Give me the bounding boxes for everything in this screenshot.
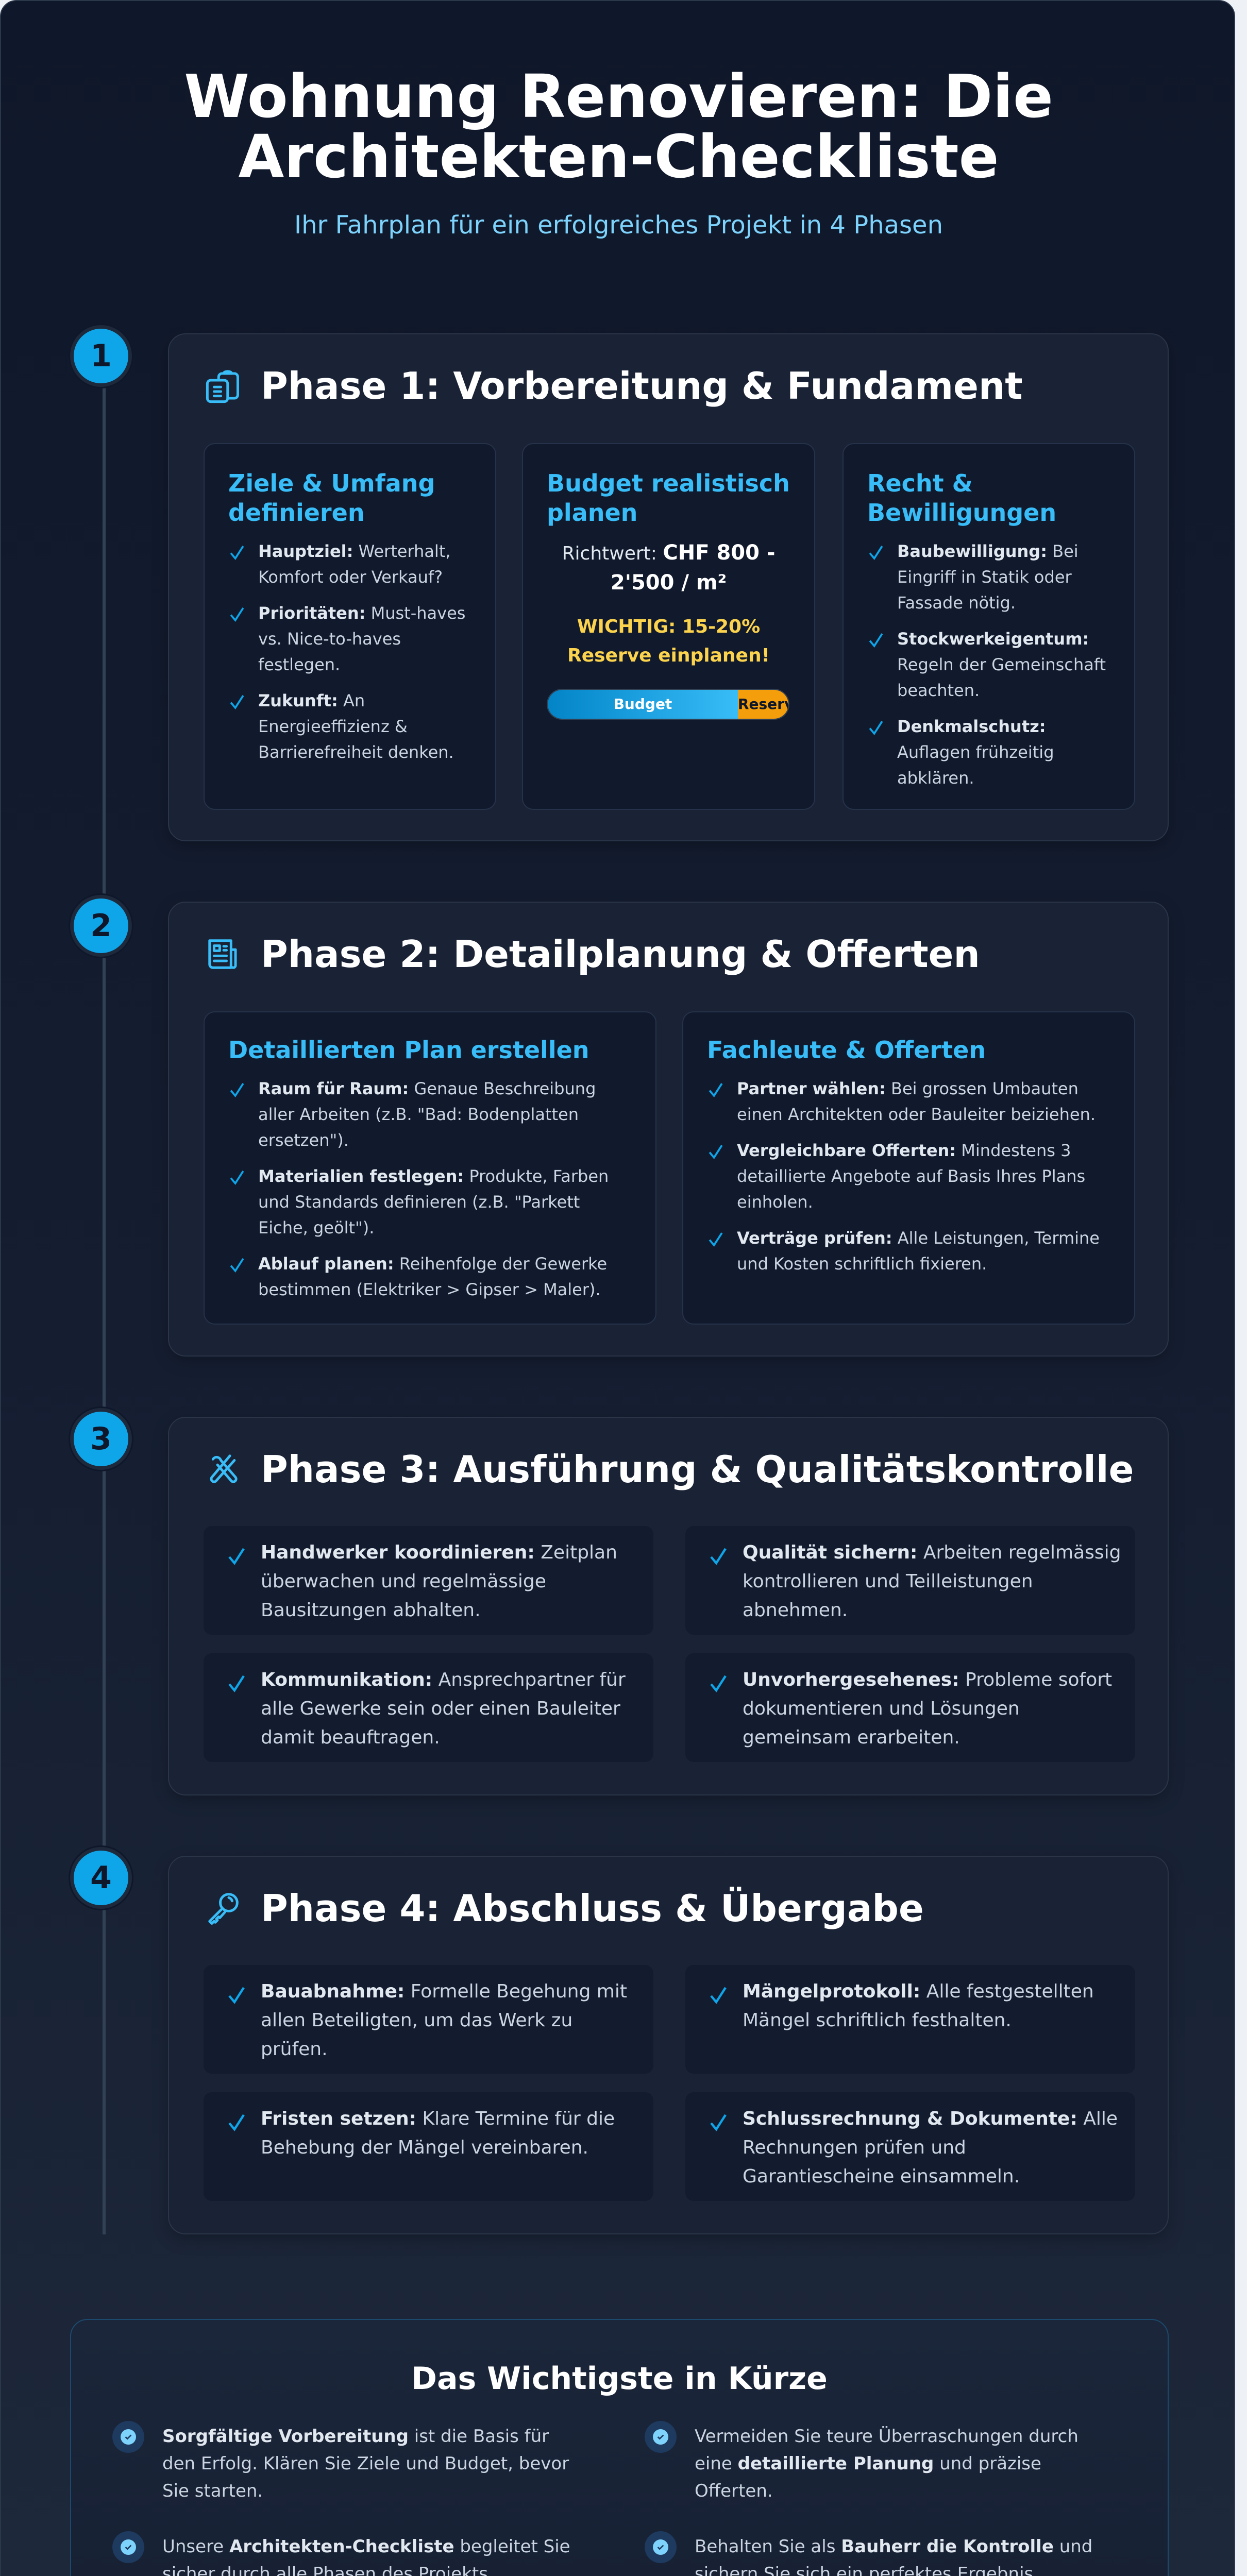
subcard: plan: Raum für Raum: Genaue Beschreibung aller Arbeiten (z.B. "Bad: Bodenplatten ersetzen"). — [258, 1079, 596, 1150]
title: Architekten-Checkliste — [238, 123, 999, 192]
icon: tools — [210, 1454, 238, 1483]
reserve note: WICHTIG: 15-20% Reserve einplanen! — [567, 616, 770, 666]
budget bar: Budget — [614, 696, 672, 713]
step marker 1: 1 — [90, 338, 112, 374]
summary item 4: Behalten Sie als Bauherr die Kontrolle und — [695, 2536, 1092, 2557]
subcard: offerten: Vergleichbare Offerten: Mindestens 3 detaillierte Angebote auf Basis Ihres Plans einholen. — [737, 1141, 1085, 1212]
item: unvorhergesehenes — [685, 1653, 1135, 1762]
icon: key — [208, 1893, 239, 1925]
item: maengelprotokoll: Mängelprotokoll: Alle festgestellten — [743, 1981, 1094, 2002]
subcard: plan — [204, 1011, 656, 1325]
item: fristen: Fristen setzen: Klare Termine für die — [261, 2108, 615, 2129]
step marker 4 — [70, 1847, 132, 1909]
subcard: recht: Recht & Bewilligungen — [867, 469, 1056, 527]
summary item 3 — [112, 2531, 570, 2576]
item: maengelprotokoll — [685, 1965, 1135, 2074]
item: bauabnahme: Bauabnahme: Formelle Begehung mit — [261, 1981, 627, 2002]
subcard: recht: Stockwerkeigentum: Regeln der Gemeinschaft beachten. — [897, 629, 1106, 700]
summary item 3: Unsere Architekten-Checkliste begleitet Sie — [162, 2536, 570, 2557]
heading: phase 2: Phase 2: Detailplanung & Offerten — [261, 933, 980, 976]
subcard: budget — [522, 443, 815, 810]
step marker 4: 4 — [90, 1860, 112, 1896]
subcard: plan: Materialien festlegen: Produkte, Farben und Standards definieren (z.B. "Parkett Eiche, geölt"). — [258, 1166, 609, 1238]
heading: phase 1: Phase 1: Vorbereitung & Fundament — [261, 364, 1023, 408]
budget value: Richtwert: CHF 800 - 2'500 / m² — [562, 541, 775, 595]
icon: clipboard — [206, 370, 239, 403]
subtitle: Ihr Fahrplan für ein erfolgreiches Projekt in 4 Phasen — [294, 211, 943, 240]
item: schlussrechnung — [685, 2092, 1135, 2201]
subcard: ziele: Prioritäten: Must-haves vs. Nice-to-haves festlegen. — [258, 603, 465, 674]
subcard: offerten: Partner wählen: Bei grossen Umbauten einen Architekten oder Bauleiter beiziehen. — [737, 1079, 1096, 1124]
subcard: plan: Ablauf planen: Reihenfolge der Gewerke bestimmen (Elektriker > Gipser > Maler). — [258, 1254, 607, 1299]
item: unvorhergesehenes: Unvorhergesehenes: Probleme sofort — [743, 1669, 1112, 1690]
item: schlussrechnung: Schlussrechnung & Dokumente: Alle — [743, 2108, 1118, 2129]
summary item 1: den Erfolg. Klären Sie Ziele und Budget, bevor — [162, 2453, 569, 2474]
subcard: offerten: Verträge prüfen: Alle Leistungen, Termine und Kosten schriftlich fixieren. — [737, 1228, 1100, 1274]
item: unvorhergesehenes: gemeinsam erarbeiten. — [743, 1727, 960, 1748]
item: qualitaet — [685, 1526, 1135, 1635]
subcard: recht: Baubewilligung: Bei Eingriff in Statik oder Fassade nötig. — [897, 541, 1079, 613]
item: qualitaet: Qualität sichern: Arbeiten regelmässig — [743, 1542, 1121, 1563]
summary heading: Das Wichtigste in Kürze — [411, 2361, 828, 2397]
item: kommunikation — [204, 1653, 653, 1762]
summary item 2: Offerten. — [695, 2481, 773, 2501]
step marker 2: 2 — [90, 908, 112, 944]
item: bauabnahme — [204, 1965, 653, 2074]
subcard: offerten — [682, 1011, 1135, 1325]
panel: phase 3 — [168, 1417, 1169, 1795]
item: handwerker: überwachen und regelmässige — [261, 1571, 546, 1592]
item: handwerker: Bausitzungen abhalten. — [261, 1600, 481, 1621]
item: fristen: Behebung der Mängel vereinbaren. — [261, 2137, 588, 2158]
budget bar — [547, 689, 789, 720]
step marker 2 — [70, 895, 132, 957]
step marker 1 — [70, 325, 132, 387]
title — [184, 62, 1053, 192]
panel: summary — [70, 2319, 1169, 2576]
item: kommunikation: Kommunikation: Ansprechpartner für — [261, 1669, 626, 1690]
subcard: ziele: Zukunft: An Energieeffizienz & Barrierefreiheit denken. — [258, 691, 454, 762]
item: bauabnahme: prüfen. — [261, 2039, 328, 2060]
summary item 1 — [112, 2421, 569, 2501]
item: schlussrechnung: Garantiescheine einsammeln. — [743, 2166, 1020, 2187]
subcard: ziele: Ziele & Umfang definieren — [228, 469, 435, 527]
summary item 2 — [645, 2421, 1079, 2501]
item: handwerker: Handwerker koordinieren: Zeitplan — [261, 1542, 617, 1563]
item: handwerker — [204, 1526, 653, 1635]
item: schlussrechnung: Rechnungen prüfen und — [743, 2137, 966, 2158]
item: fristen — [204, 2092, 653, 2201]
subcard: plan: Detaillierten Plan erstellen — [228, 1036, 589, 1064]
summary item 4 — [645, 2531, 1092, 2576]
step marker 3: 3 — [90, 1421, 112, 1457]
heading: phase 4: Phase 4: Abschluss & Übergabe — [261, 1887, 924, 1930]
item: unvorhergesehenes: dokumentieren und Lösungen — [743, 1698, 1020, 1719]
panel: phase 2 — [168, 902, 1169, 1357]
icon: newspaper — [208, 939, 237, 969]
summary item 2: Vermeiden Sie teure Überraschungen durch — [695, 2426, 1079, 2447]
summary item 2: eine detaillierte Planung und präzise — [695, 2453, 1041, 2474]
panel: phase 1 — [168, 333, 1169, 841]
timeline line — [103, 356, 106, 2234]
item: bauabnahme: allen Beteiligten, um das Werk zu — [261, 2010, 572, 2031]
item: qualitaet: kontrollieren und Teilleistungen — [743, 1571, 1033, 1592]
subcard: offerten: Fachleute & Offerten — [707, 1036, 986, 1064]
heading: phase 3: Phase 3: Ausführung & Qualitätskontrolle — [261, 1448, 1134, 1491]
summary item 1: Sie starten. — [162, 2481, 263, 2501]
item: qualitaet: abnehmen. — [743, 1600, 848, 1621]
panel: phase 4 — [168, 1856, 1169, 2234]
item: kommunikation: damit beauftragen. — [261, 1727, 440, 1748]
summary item 1: Sorgfältige Vorbereitung ist die Basis für — [162, 2426, 549, 2447]
item: maengelprotokoll: Mängel schriftlich festhalten. — [743, 2010, 1012, 2031]
title: Wohnung Renovieren: Die — [184, 62, 1053, 131]
subcard: recht — [842, 443, 1135, 810]
subcard: budget: Budget realistisch planen — [547, 469, 790, 527]
subcard: recht: Denkmalschutz: Auflagen frühzeitig abklären. — [897, 717, 1054, 788]
subcard: ziele: Hauptziel: Werterhalt, Komfort oder Verkauf? — [258, 541, 451, 587]
subcard: ziele — [204, 443, 496, 810]
item: kommunikation: alle Gewerke sein oder einen Bauleiter — [261, 1698, 620, 1719]
step marker 3 — [70, 1408, 132, 1470]
